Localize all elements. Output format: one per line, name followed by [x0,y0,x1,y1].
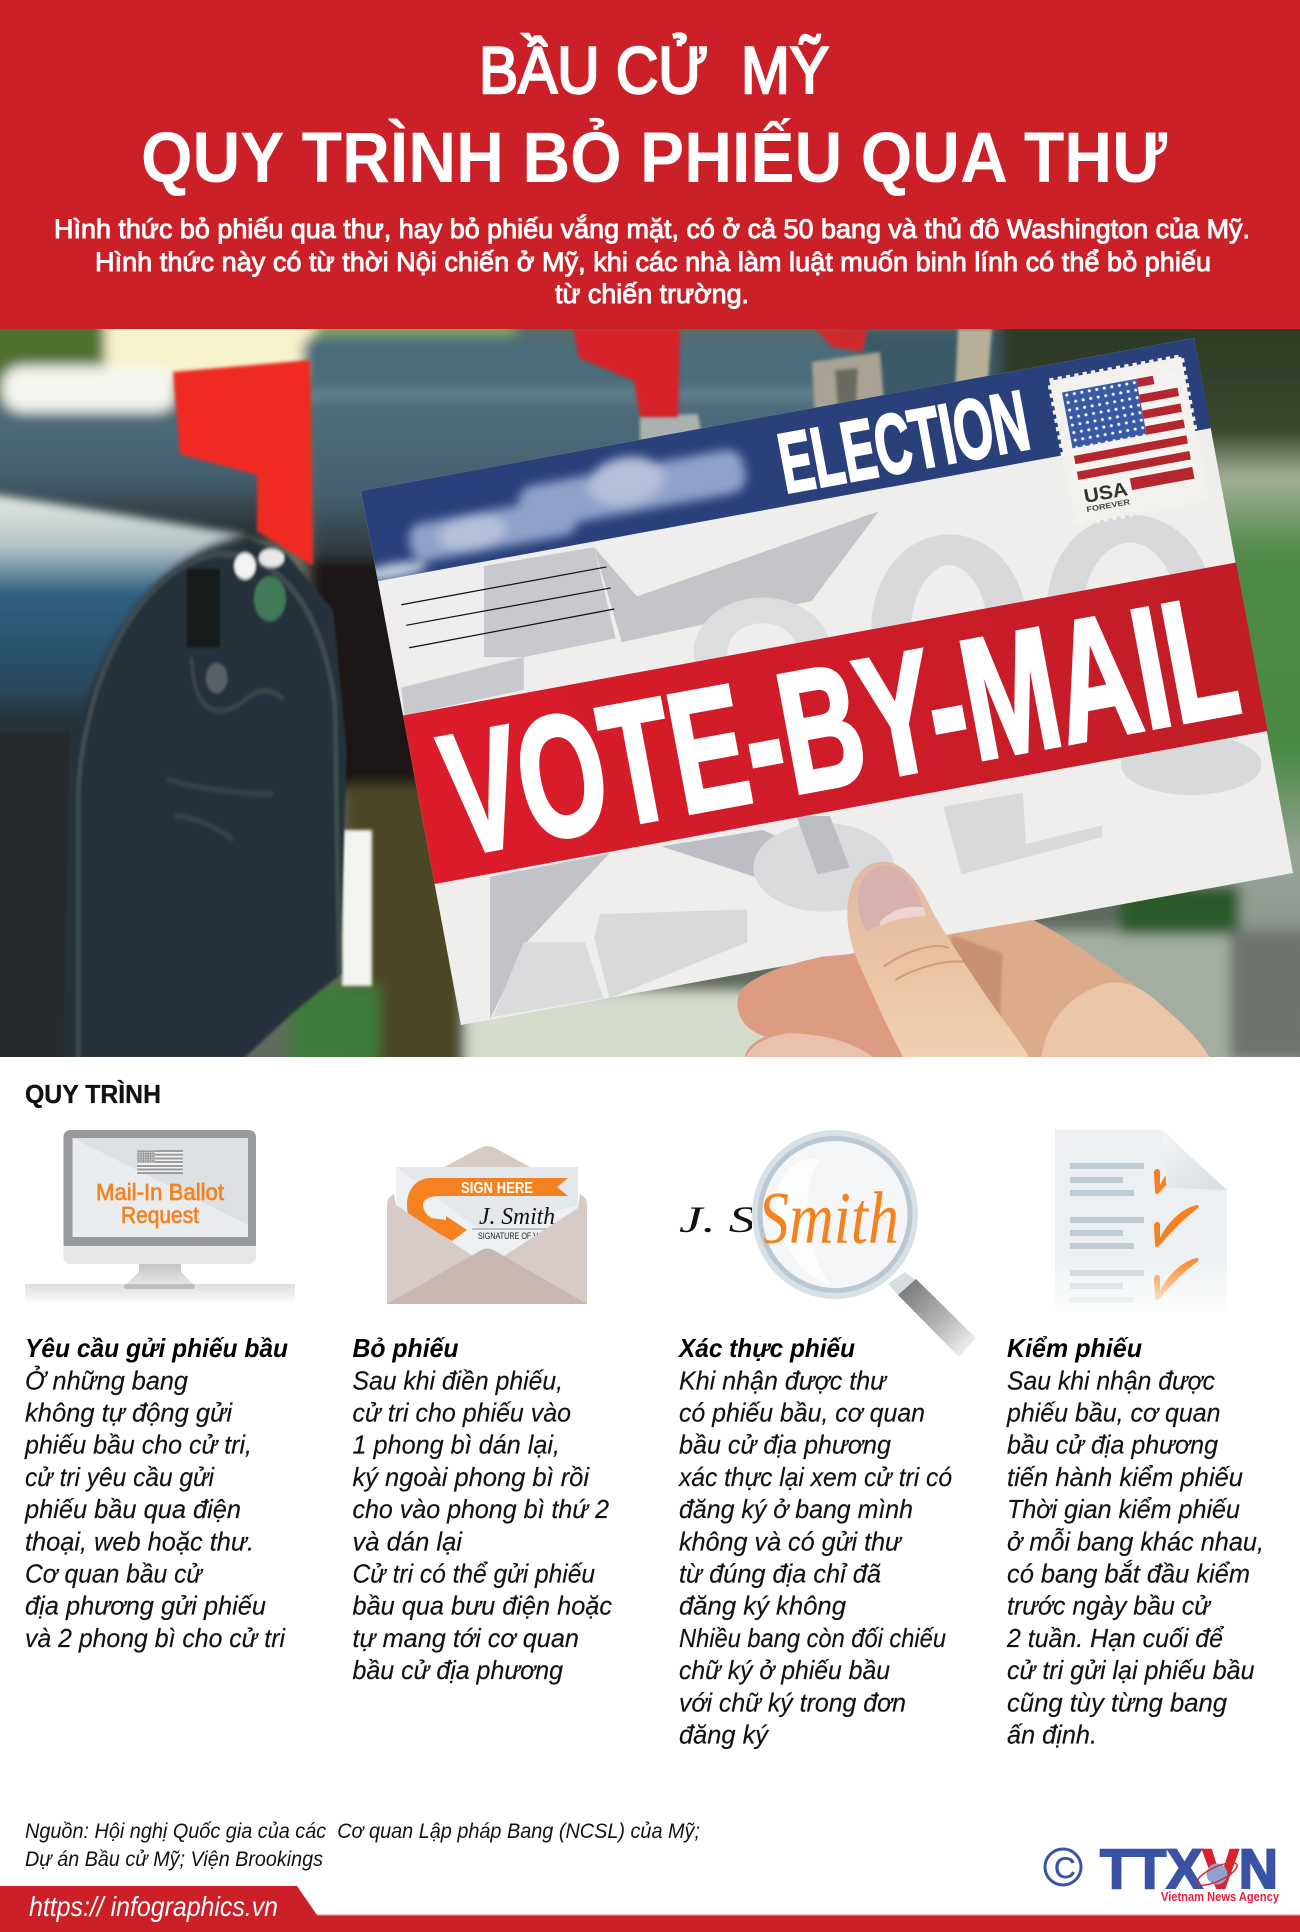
intro text [54,213,1250,309]
step 3 text: bầu cử địa phương [679,1430,892,1460]
source note: Nguồn: Hội nghị Quốc gia của các Cơ quan Lập pháp Bang (NCSL) của Mỹ; [25,1820,700,1843]
step 2 text: cho vào phong bì thứ 2 [352,1494,610,1524]
step 1 text: địa phương gửi phiếu [25,1591,266,1621]
address lines [401,567,614,648]
step 1 text: cử tri yêu cầu gửi [25,1462,215,1492]
source note: Dự án Bầu cử Mỹ; Viện Brookings [25,1848,323,1871]
step 4 text: ấn định. [1007,1720,1097,1750]
step 4 text: Sau khi nhận được [1007,1365,1215,1395]
copyright mark [1045,1849,1081,1885]
step 4 text: trước ngày bầu cử [1007,1591,1211,1621]
step 2 text [352,1333,612,1685]
step 1 text: không tự động gửi [25,1398,233,1428]
black signature: J. Smith [679,1200,849,1241]
step 4 text: Thời gian kiểm phiếu [1007,1494,1240,1524]
red band [403,562,1268,884]
step 1 text: thoại, web hoặc thư. [25,1526,254,1556]
step 3 text: đăng ký [679,1720,770,1750]
postcard [344,338,1293,1025]
sign here banner [407,1178,568,1241]
signature: J. Smith [479,1204,555,1230]
step 2 text: tự mang tới cơ quan [352,1623,579,1653]
stamp: FOREVER [1086,497,1131,514]
step 3 text: Khi nhận được thư [679,1365,887,1395]
back fingers [946,920,1140,1057]
step 3 text: với chữ ký trong đơn [679,1687,906,1717]
faded 2020 background graphic [401,511,1262,1019]
monitor text: Request [121,1202,200,1228]
hand holding the card [738,862,1213,1063]
step 4 text [1006,1333,1264,1750]
title: QUY TRÌNH BỎ PHIẾU QUA THƯ [141,118,1167,198]
step 2 text: bầu qua bưu điện hoặc [352,1591,612,1621]
title: BẦU CỬ MỸ [479,33,829,107]
icon: computer with mail-in ballot request [25,1130,295,1304]
step 1 text: Cơ quan bầu cử [25,1558,203,1588]
thumbnail [858,865,926,932]
step 4 text: phiếu bầu, cơ quan [1006,1398,1220,1428]
flag: front mailbox [173,360,313,566]
flag: back mailbox [573,329,680,417]
step 1 text: Yêu cầu gửi phiếu bầu [25,1333,288,1363]
step 3 text: xác thực lại xem cử tri có [677,1462,952,1492]
section heading: QUY TRÌNH [25,1079,161,1109]
icon: document with check marks [1055,1130,1227,1303]
thumb [847,862,1033,1063]
ELECTION: ELECTION [771,372,1036,511]
step 3 text: đăng ký ở bang mình [679,1494,913,1524]
intro text: Hình thức này có từ thời Nội chiến ở Mỹ, khi các nhà làm luật muốn binh lính có thể bỏ phiếu [95,247,1211,277]
photo: mailboxes and vote-by-mail card [0,310,1300,1075]
icon: magnifying glass over signature [679,1130,976,1357]
step 1 text: và 2 phong bì cho cử tri [25,1623,286,1653]
check marks [1154,1168,1198,1300]
logo: TTXVN [1045,1837,1280,1904]
website url: https:// infographics.vn [29,1891,278,1922]
blurred background [0,310,1300,1075]
card artwork [344,338,1270,900]
stamp: USA [1082,478,1130,508]
step 4 text: Kiểm phiếu [1007,1333,1142,1363]
blue band [361,338,1211,581]
step 4 text: 2 tuần. Hạn cuối để [1006,1623,1224,1653]
footer bar with url tab [0,1886,1300,1932]
source note [25,1820,700,1871]
step 2 text: ký ngoài phong bì rồi [352,1462,590,1492]
step 2 text: Sau khi điền phiếu, [352,1365,563,1395]
step 1 text: Ở những bang [25,1364,189,1395]
step 1 text [24,1333,288,1653]
magnified signature: Smith [758,1178,899,1260]
signature: SIGNATURE OF VOTER [478,1231,558,1242]
white gap behind post [342,830,372,986]
step 2 text: 1 phong bì dán lại, [352,1430,560,1460]
front mailbox [0,494,347,1068]
intro text: Hình thức bỏ phiếu qua thư, hay bỏ phiếu vắng mặt, có ở cả 50 bang và thủ đô Washington của Mỹ. [54,213,1250,244]
intro text: từ chiến trường. [555,279,749,309]
monitor text: Mail-In Ballot [96,1179,225,1205]
agency tagline: Vietnam News Agency [1161,1889,1280,1904]
step 3 text: Xác thực phiếu [677,1333,855,1363]
step 2 text: Cử tri có thể gửi phiếu [352,1558,595,1588]
text lines [1070,1163,1144,1303]
step 3 text: từ đúng địa chỉ đã [679,1558,881,1588]
step 4 text: cũng tùy từng bang [1007,1687,1228,1717]
title [141,33,1167,198]
icon: envelope with signed ballot [387,1146,587,1304]
step 2 text: Bỏ phiếu [352,1333,459,1363]
step 4 text: ở mỗi bang khác nhau, [1007,1526,1264,1556]
step 3 text: Nhiều bang còn đối chiếu [679,1623,946,1653]
step 2 text: cử tri cho phiếu vào [352,1398,571,1428]
agency letters: TTXVN [1100,1837,1278,1900]
flag [137,1150,183,1174]
step 3 text: không và có gửi thư [679,1526,902,1556]
step 2 text: và dán lại [352,1526,463,1556]
step 2 text: bầu cử địa phương [352,1655,564,1685]
copyright mark: C [1054,1852,1076,1885]
fold [1162,1130,1227,1190]
sign here banner: SIGN HERE [461,1180,533,1197]
header band [0,0,1300,329]
step 4 text: bầu cử địa phương [1007,1430,1219,1460]
step 1 text: phiếu bầu cho cử tri, [24,1430,252,1460]
step 4 text: tiến hành kiểm phiếu [1007,1462,1243,1492]
step 4 text: cử tri gửi lại phiếu bầu [1007,1655,1254,1685]
signature [472,1207,554,1239]
step 3 text: có phiếu bầu, cơ quan [679,1398,925,1428]
step 4 text: có bang bắt đầu kiểm [1007,1558,1250,1588]
step 3 text: chữ ký ở phiếu bầu [679,1655,890,1685]
step 1 text: phiếu bầu qua điện [24,1494,241,1524]
stamp [1050,357,1208,524]
back mailbox hardware [640,329,992,452]
step 3 text: đăng ký không [679,1591,847,1621]
monitor text [96,1179,225,1228]
step 3 text [677,1333,952,1750]
